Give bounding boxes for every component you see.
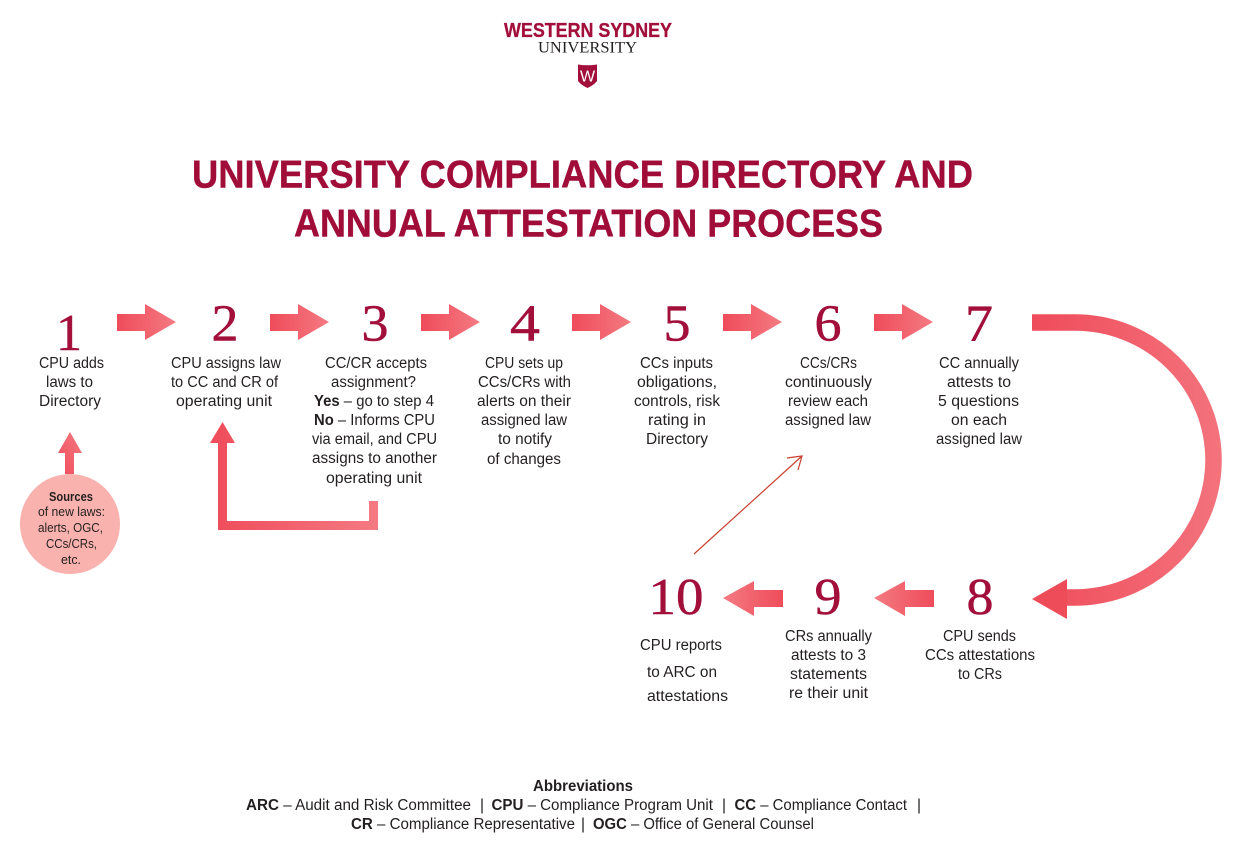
step 6: assigned law [785,412,872,429]
step 3: operating unit [326,470,423,487]
step 7: 5 questions [938,393,1019,410]
step 9: statements [790,666,867,683]
callout: sources of new laws: Sources [49,490,93,504]
step 3: No – Informs CPU [314,412,435,429]
step 10: to ARC on [647,664,717,681]
abbreviations legend: Abbreviations [533,778,633,795]
step 3 [312,296,437,487]
abbreviations legend: CC – Compliance Contact [734,797,908,814]
step 4: alerts on their [477,393,571,410]
arrow: step 9 to 10 [723,581,783,616]
step 10: CPU reports [640,637,722,654]
arrow: step 5 to 6 [723,304,782,340]
step 5: controls, risk [634,393,720,410]
step 10 [640,569,728,705]
step 2 [171,296,282,410]
step 4: to notify [498,431,552,448]
step 1: laws to [46,374,93,391]
step 5: obligations, [637,374,717,391]
thin arrow: step 10 back to step 6 [694,456,802,554]
step 8: CCs attestations [925,647,1035,664]
arrow: step 3 to 4 [421,304,480,340]
arrow: step 6 to 7 [874,304,933,340]
step 2: CPU assigns law [171,355,282,372]
step 5: 5 [664,296,690,352]
step 9: 9 [814,569,842,626]
step 7: 7 [965,296,993,352]
abbreviations legend: OGC – Office of General Counsel [593,816,814,833]
title: ANNUAL ATTESTATION PROCESS [294,202,883,246]
step 6: 6 [814,296,842,352]
step 2: 2 [212,296,238,352]
step 8 [925,569,1035,683]
step 1 [39,305,104,410]
abbreviations legend: | [722,797,726,814]
step 3: assignment? [331,374,416,391]
step 4: of changes [487,451,561,468]
step 10: attestations [647,688,728,705]
step 5: Directory [646,431,708,448]
title: UNIVERSITY COMPLIANCE DIRECTORY AND [192,154,973,196]
step 7: attests to [947,374,1011,391]
callout: sources of new laws: of new laws: [38,505,105,519]
step 3: via email, and CPU [312,431,437,448]
step 6 [785,296,872,429]
step 4: assigned law [481,412,568,429]
logo: Western Sydney University: UNIVERSITY [538,40,637,56]
callout: sources of new laws [20,474,120,574]
logo: Western Sydney University [504,20,673,88]
step 5 [634,296,720,448]
step 8: CPU sends [943,628,1016,645]
step 2: operating unit [176,393,273,410]
step 1: Directory [39,393,101,410]
callout: sources of new laws: alerts, OGC, [38,521,103,535]
step 6: CCs/CRs [800,355,857,372]
step 9: attests to 3 [791,647,866,664]
step 7 [936,296,1023,448]
step 8: 8 [966,569,994,626]
title [192,154,973,246]
step 4: CPU sets up [485,355,563,372]
abbreviations legend: CR – Compliance Representative [351,816,575,833]
abbreviations legend [246,778,921,833]
step 2: to CC and CR of [171,374,279,391]
step 6: continuously [785,374,872,391]
step 4: 4 [510,296,540,352]
step 9: re their unit [789,685,869,702]
arrow: step 1 to 2 [117,304,176,340]
arrow: step 4 to 5 [572,304,631,340]
logo: Western Sydney University: W [580,68,596,86]
step 3: 3 [362,296,388,352]
step 7: assigned law [936,431,1023,448]
arrow: sources up to step 1 [58,432,82,474]
step 9 [785,569,872,702]
step 3: assigns to another [312,450,437,467]
abbreviations legend: ARC – Audit and Risk Committee [246,797,471,814]
abbreviations legend: CPU – Compliance Program Unit [492,797,714,814]
step 4: CCs/CRs with [478,374,571,391]
abbreviations legend: | [581,816,585,833]
callout: sources of new laws: CCs/CRs, [46,537,97,551]
curved arrow: step 7 to 8 [1032,322,1213,619]
step 8: to CRs [958,666,1002,683]
step 9: CRs annually [785,628,872,645]
step 5: CCs inputs [640,355,713,372]
step 4 [477,296,571,468]
step 6: review each [788,393,868,410]
arrow: step 8 to 9 [874,581,934,616]
abbreviations legend: | [480,797,484,814]
step 10: 10 [648,569,704,626]
step 1: CPU adds [39,355,104,372]
step 7: CC annually [939,355,1019,372]
abbreviations legend: | [917,797,921,814]
step 7: on each [951,412,1007,429]
step 1: 1 [56,305,82,362]
step 3: CC/CR accepts [325,355,427,372]
step 3: Yes – go to step 4 [314,393,434,410]
step 5: rating in [648,412,706,429]
callout: sources of new laws: etc. [61,553,81,567]
feedback arrow: step 3 back to step 2 [210,422,378,530]
logo: Western Sydney University: WESTERN SYDNEY [504,20,673,42]
arrow: step 2 to 3 [270,304,329,340]
